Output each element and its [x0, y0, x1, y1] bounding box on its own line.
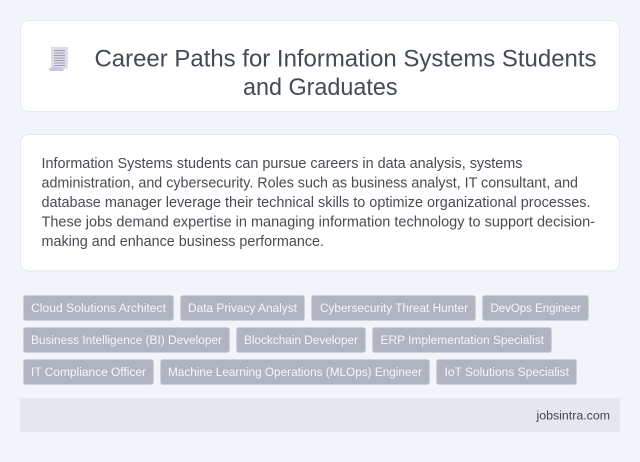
tag: IT Compliance Officer [24, 360, 154, 384]
text block: description: database manager leverage their technical skills to optimize organizational processes. [42, 195, 590, 211]
icon: document [49, 47, 68, 71]
text block: description: These jobs demand expertise in managing information technology to support decision- [42, 214, 595, 230]
panel: description [20, 134, 620, 271]
tag: Blockchain Developer: Blockchain Developer [244, 333, 358, 347]
tag: Cybersecurity Threat Hunter: Cybersecurity Threat Hunter [320, 301, 468, 315]
text block: description: Information Systems students can pursue careers in data analysis, systems [42, 156, 522, 172]
footer source: jobsintra.com [536, 408, 610, 422]
text block: description [42, 156, 595, 250]
tag: Machine Learning Operations (MLOps) Engineer [160, 360, 430, 384]
title [94, 46, 596, 101]
panel: header [20, 20, 620, 112]
tag: Cloud Solutions Architect: Cloud Solutions Architect [31, 301, 167, 315]
tag: Data Privacy Analyst: Data Privacy Analyst [188, 301, 298, 315]
tag: ERP Implementation Specialist: ERP Implementation Specialist [380, 333, 545, 347]
tag: Blockchain Developer [236, 328, 366, 352]
tag: IoT Solutions Specialist [436, 360, 576, 384]
tag: DevOps Engineer: DevOps Engineer [490, 301, 581, 315]
text block: description: making and enhance business performance. [42, 234, 324, 250]
tags: career roles [24, 296, 588, 384]
tag: DevOps Engineer [482, 296, 588, 320]
tag: IoT Solutions Specialist: IoT Solutions Specialist [444, 365, 570, 379]
tag: Cloud Solutions Architect [24, 296, 174, 320]
tag: IT Compliance Officer: IT Compliance Officer [31, 365, 146, 379]
tag: Business Intelligence (BI) Developer: Business Intelligence (BI) Developer [31, 333, 222, 347]
title: and Graduates [243, 74, 398, 101]
footer [20, 398, 620, 432]
tag: ERP Implementation Specialist [372, 328, 552, 352]
title: Career Paths for Information Systems Students [94, 46, 596, 72]
tag: Business Intelligence (BI) Developer [24, 328, 230, 352]
tag: Data Privacy Analyst [180, 296, 304, 320]
tag: Machine Learning Operations (MLOps) Engineer: Machine Learning Operations (MLOps) Engineer [168, 365, 422, 379]
tag: Cybersecurity Threat Hunter [312, 296, 476, 320]
text block: description: administration, and cybersecurity. Roles such as business analyst, IT consultant, and [42, 176, 578, 192]
